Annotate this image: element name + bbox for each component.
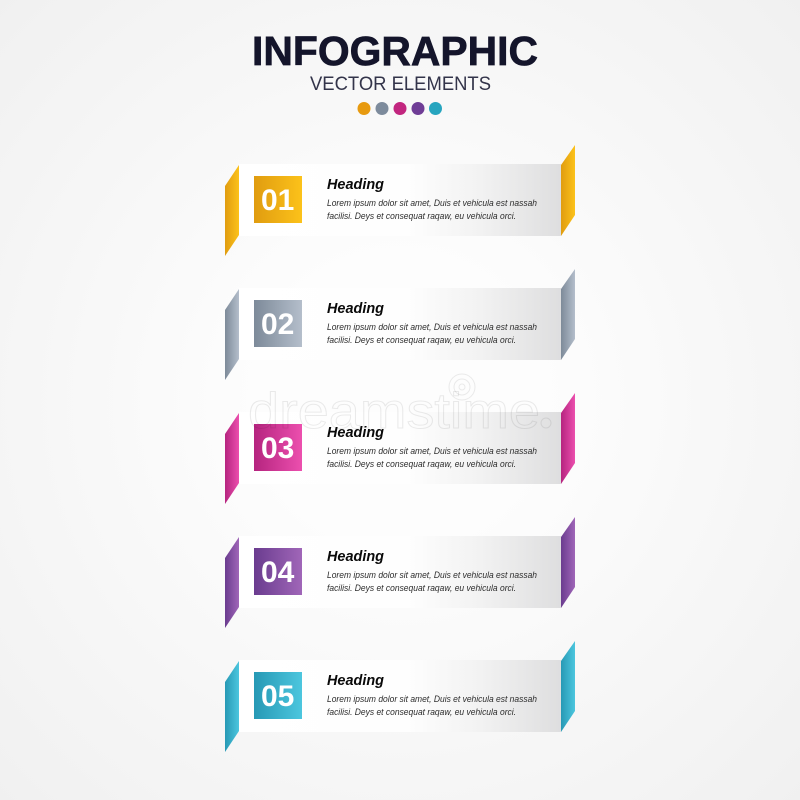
panel: step 04: facilisi. Deys et consequat raqaw, eu vehicula orci.: [327, 583, 516, 593]
panel: step 01: Heading: [327, 176, 384, 193]
panel: step 04: Heading: [327, 548, 384, 565]
watermark: dreamstime: [248, 383, 540, 439]
panel: step 02: Heading: [327, 300, 384, 317]
subtitle: VECTOR ELEMENTS: [310, 74, 491, 95]
title: INFOGRAPHIC: [252, 28, 538, 74]
panel: step 05: facilisi. Deys et consequat raqaw, eu vehicula orci.: [327, 707, 516, 717]
panel: step 03: Lorem ipsum dolor sit amet, Duis et vehicula est nassah: [327, 446, 537, 456]
panel: step 04: 04: [261, 556, 295, 589]
panel: step 03: 03: [261, 432, 294, 465]
panel: step 05: [225, 641, 575, 752]
panel: step 01: Lorem ipsum dolor sit amet, Duis et vehicula est nassah: [327, 198, 537, 208]
panel: step 05: Lorem ipsum dolor sit amet, Duis et vehicula est nassah: [327, 694, 537, 704]
panel: step 01: [225, 145, 575, 256]
panel: step 05: 05: [261, 680, 294, 713]
panel: step 04: [225, 517, 575, 628]
panel: step 02: facilisi. Deys et consequat raqaw, eu vehicula orci.: [327, 335, 516, 345]
panel: step 03: Heading: [327, 424, 384, 441]
panel: step 02: Lorem ipsum dolor sit amet, Duis et vehicula est nassah: [327, 322, 537, 332]
panel: step 03: [225, 393, 575, 504]
panel: step 01: facilisi. Deys et consequat raqaw, eu vehicula orci.: [327, 211, 516, 221]
panel: step 05: Heading: [327, 672, 384, 689]
panel: step 01: 01: [261, 184, 294, 217]
panel: step 02: 02: [261, 308, 294, 341]
panel: step 03: facilisi. Deys et consequat raqaw, eu vehicula orci.: [327, 459, 516, 469]
colour dots: [358, 102, 442, 115]
panel: step 02: [225, 269, 575, 380]
panel: step 04: Lorem ipsum dolor sit amet, Duis et vehicula est nassah: [327, 570, 537, 580]
